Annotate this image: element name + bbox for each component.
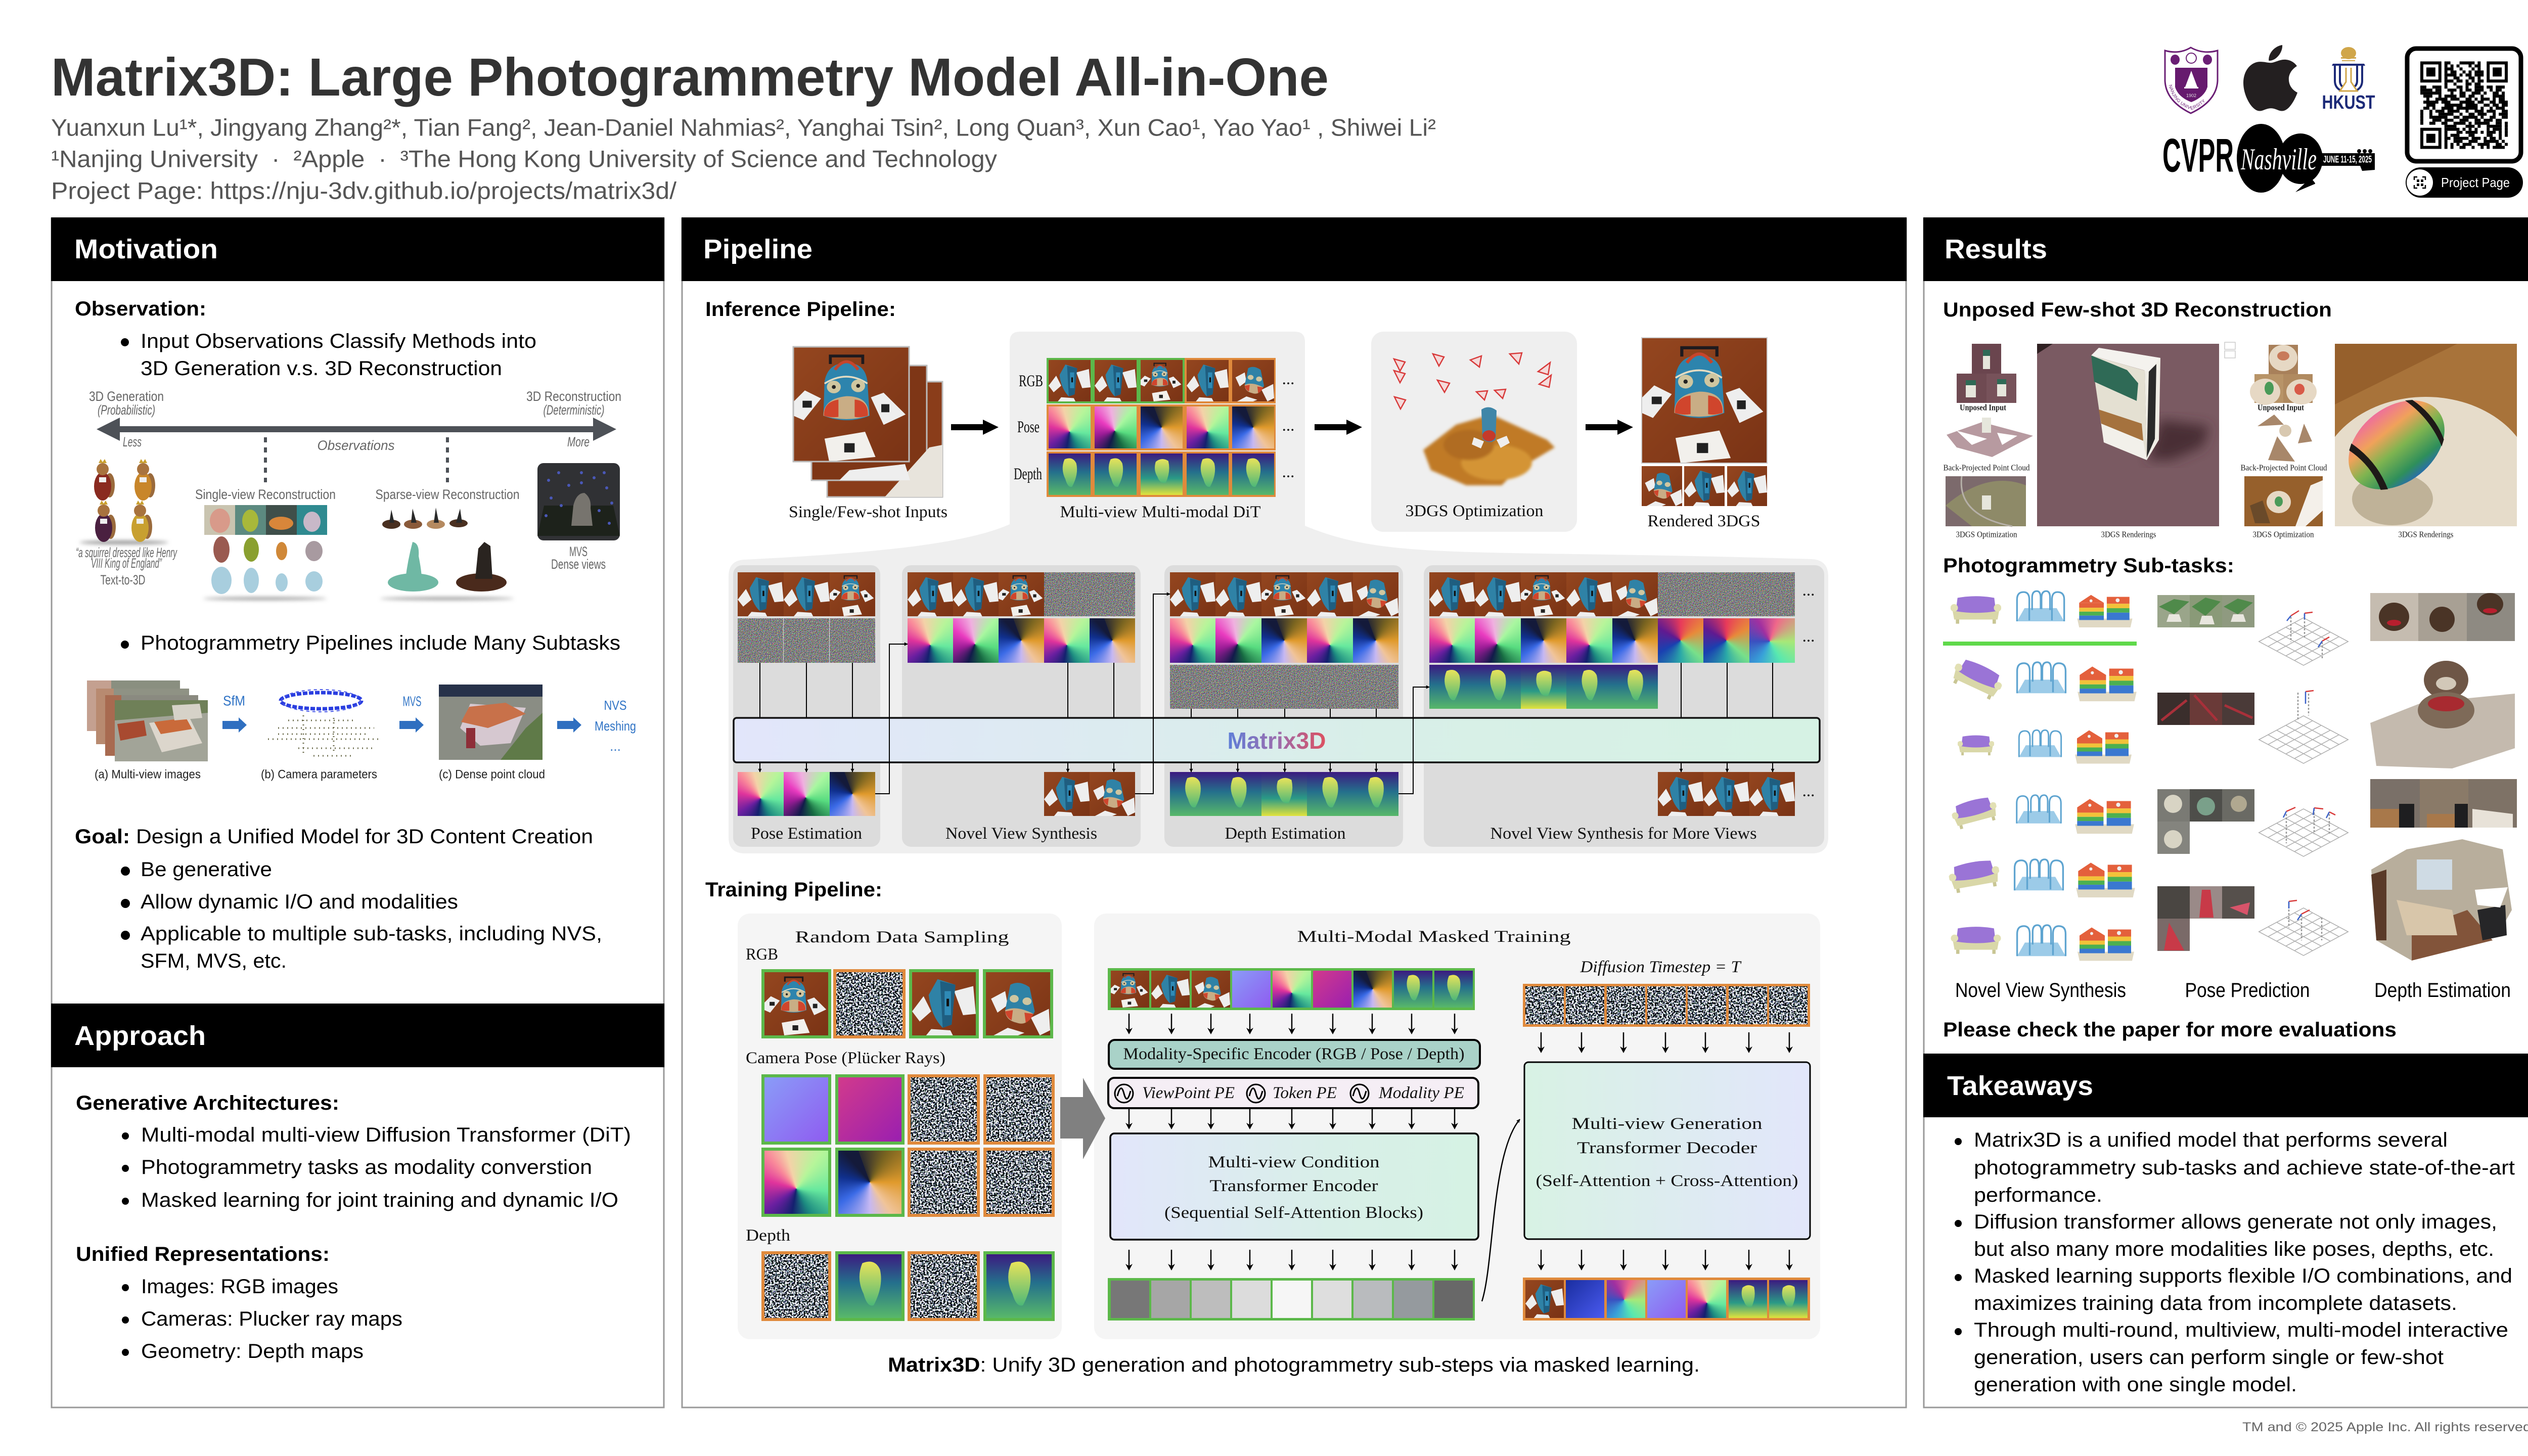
illustration: text-to-3D squirrels — [76, 459, 177, 587]
goal text — [75, 826, 602, 972]
unified representations text — [76, 1243, 402, 1362]
arrow: further subtasks: NVS — [604, 698, 627, 713]
Matrix3D model bar — [734, 718, 1820, 762]
takeaways list: generation with one single model. — [1974, 1374, 2297, 1396]
book example thumbnails — [1944, 344, 2033, 539]
chart: observation spectrum arrow: (Probabilistic) — [98, 402, 155, 418]
multi-view generation transformer decoder: (Self-Attention + Cross-Attention) — [1536, 1172, 1798, 1190]
input image stack: Single/Few-shot Inputs — [789, 503, 947, 521]
pipeline heading text: Pipeline — [703, 234, 812, 264]
unified representations text: Images: RGB images — [141, 1276, 338, 1298]
logo: CVPR Nashville: JUNE 11-15, 2025 — [2323, 155, 2372, 165]
multi-view multi-modal grid: ... — [1282, 463, 1294, 481]
panel: random data sampling: Depth — [746, 1226, 791, 1245]
unposed reconstruction heading: Unposed Few-shot 3D Reconstruction — [1943, 299, 2332, 321]
panel: random data sampling — [738, 914, 1062, 1339]
heading: takeaways: Takeaways — [1947, 1071, 2093, 1101]
sub-panel: novel view synthesis for more views — [1424, 565, 1824, 847]
output token strip — [1523, 1278, 1810, 1321]
affiliations: ¹Nanjing University · ²Apple · ³The Hong Kong University of Science and Technology — [51, 146, 998, 172]
novel view synthesis examples: Novel View Synthesis — [1955, 979, 2126, 1002]
book example thumbnails: Back-Projected Point Cloud — [1944, 463, 2030, 472]
illustration: MVS dense views: Dense views — [551, 557, 606, 572]
panel: pipeline — [682, 217, 1907, 1407]
multi-view multi-modal grid: Pose — [1017, 418, 1040, 436]
chart: observation spectrum arrow: (Deterministic) — [543, 402, 605, 418]
takeaways list: Matrix3D is a unified model that performs several — [1974, 1129, 2448, 1151]
ball 3DGS rendering: 3DGS Renderings — [2399, 530, 2453, 539]
multi-view multi-modal grid: ... — [1282, 370, 1294, 388]
illustration: camera parameters — [261, 690, 382, 782]
panel: random data sampling: RGB — [746, 945, 778, 964]
illustration: multi-view images — [87, 680, 208, 782]
ball example thumbnails: Unposed Input — [2258, 402, 2304, 413]
inference pipeline heading: Inference Pipeline: — [705, 298, 896, 321]
goal text: Allow dynamic I/O and modalities — [141, 891, 458, 913]
observation bullet text: 3D Generation v.s. 3D Reconstruction — [141, 357, 502, 380]
sub-panel: depth estimation — [1164, 565, 1403, 847]
depth estimation examples: Depth Estimation — [2374, 979, 2511, 1002]
arrow: DiT to 3DGS — [1315, 420, 1362, 435]
generative architectures text: Generative Architectures: — [76, 1092, 339, 1114]
illustration: text-to-3D squirrels: Text-to-3D — [100, 572, 146, 587]
sub-panel: novel view synthesis for more views: ... — [1802, 782, 1815, 800]
goal text: Applicable to multiple sub-tasks, including NVS, — [141, 923, 602, 945]
positional encodings: ViewPoint PE — [1142, 1084, 1235, 1102]
takeaways list: but also many more modalities like poses, depths, etc. — [1974, 1238, 2494, 1260]
book example thumbnails: 3DGS Optimization — [1956, 530, 2017, 539]
panel: motivation — [51, 217, 664, 1407]
goal text: Be generative — [141, 858, 272, 881]
modality-specific encoder: Modality-Specific Encoder (RGB / Pose / Depth) — [1123, 1045, 1464, 1063]
arrow: further subtasks: Meshing — [595, 718, 636, 734]
takeaways list — [1955, 1129, 2515, 1396]
connector lines into and out of Matrix3D — [760, 594, 1773, 794]
observation bullet text — [121, 330, 536, 380]
takeaways list: Masked learning supports flexible I/O combinations, and — [1974, 1265, 2512, 1287]
multi-view multi-modal grid: Multi-view Multi-modal DiT — [1060, 503, 1261, 521]
takeaways list: generation, users can perform single or few-shot — [1974, 1346, 2444, 1369]
training pipeline heading: Training Pipeline: — [705, 879, 882, 901]
panel: results — [1923, 217, 2528, 1407]
generative architectures text — [76, 1092, 631, 1211]
pipeline caption: Matrix3D : Unify 3D generation and photogrammetry sub-steps via masked learning. — [888, 1354, 1700, 1376]
modality-specific encoder — [1109, 1040, 1480, 1069]
arrow: SfM — [222, 693, 247, 733]
takeaways list: maximizes training data from incomplete datasets. — [1974, 1292, 2457, 1314]
Matrix3D model bar: Matrix3D — [1228, 727, 1326, 754]
panel: random data sampling: Camera Pose (Plücker Rays) — [746, 1049, 945, 1067]
unified representations text: Geometry: Depth maps — [141, 1340, 364, 1362]
multi-view condition transformer encoder: Transformer Encoder — [1209, 1177, 1378, 1195]
illustration: camera parameters: (b) Camera parameters — [261, 767, 377, 782]
photogrammetry sub-tasks heading: Photogrammetry Sub-tasks: — [1943, 555, 2234, 577]
rendered 3DGS images: Rendered 3DGS — [1647, 512, 1760, 530]
illustration: multi-view images: (a) Multi-view images — [95, 767, 201, 782]
multi-view condition transformer encoder: (Sequential Self-Attention Blocks) — [1164, 1204, 1423, 1222]
evaluation note: Please check the paper for more evaluations — [1943, 1019, 2397, 1041]
project page link: Project Page: https://nju-3dv.github.io/projects/matrix3d/ — [51, 177, 677, 204]
noise token strip — [1523, 984, 1810, 1027]
panel: multi-modal masked training: Multi-Modal Masked Training — [1297, 928, 1570, 946]
logo: Apple — [2243, 45, 2297, 111]
positional encodings: Modality PE — [1378, 1084, 1464, 1102]
illustration: sparse-view reconstruction: Sparse-view Reconstruction — [375, 487, 520, 502]
multi-view multi-modal grid: Depth — [1014, 465, 1042, 483]
positional encodings — [1108, 1078, 1478, 1108]
pose prediction examples — [2157, 595, 2348, 1002]
input token strip — [1108, 968, 1475, 1010]
arrow: 3DGS to render — [1586, 420, 1633, 435]
generative architectures text: Masked learning for joint training and dynamic I/O — [141, 1189, 618, 1211]
chart: observation spectrum arrow — [89, 389, 621, 482]
panel: 3DGS optimization — [1371, 332, 1577, 532]
arrows: noise to decoder — [1538, 1032, 1793, 1053]
arrows: encoder to tokens — [1125, 1250, 1458, 1270]
ball example thumbnails: Back-Projected Point Cloud — [2241, 463, 2327, 472]
positional encodings: Token PE — [1273, 1084, 1337, 1102]
novel view synthesis examples — [1943, 591, 2137, 1002]
logo: Nanjing University — [2164, 47, 2219, 114]
panel: multi-modal masked training — [1094, 914, 1820, 1339]
takeaways list: Through multi-round, multiview, multi-model interactive — [1974, 1319, 2508, 1341]
multi-view multi-modal grid: ... — [1282, 417, 1294, 435]
heading: approach — [51, 1004, 664, 1067]
illustration: single-view reconstruction — [195, 487, 336, 600]
arrow: MVS: MVS — [402, 694, 422, 709]
photogrammetry subtasks bullet: Photogrammetry Pipelines include Many Subtasks — [141, 632, 620, 654]
QR code — [2407, 49, 2521, 161]
multi-view condition transformer encoder: Multi-view Condition — [1208, 1153, 1379, 1171]
panel: multi-view DiT and expanded tasks background — [729, 332, 1828, 853]
rendered 3DGS images — [1642, 338, 1767, 530]
unified representations text: Unified Representations: — [76, 1243, 330, 1265]
arrow: encoder output to decoder — [1482, 1119, 1520, 1301]
illustration: dense point cloud — [439, 685, 545, 782]
multi-view generation transformer decoder: Multi-view Generation — [1571, 1115, 1763, 1133]
arrows: PE to condition encoder — [1125, 1109, 1458, 1129]
arrow: MVS — [399, 694, 424, 733]
arrow: further subtasks: ... — [610, 739, 621, 754]
goal text: Goal: Design a Unified Model for 3D Content Creation — [75, 826, 593, 848]
logo: Nanjing University: NANJING UNIVERSITY — [2169, 85, 2204, 110]
encoded grey token strip — [1108, 1278, 1475, 1321]
authors: Yuanxun Lu¹*, Jingyang Zhang²*, Tian Fang², Jean-Daniel Nahmias², Yanghai Tsin², Long Quan³, Xun Cao¹, Yao Yao¹ , Shiwei Li² — [51, 114, 1436, 141]
input image stack — [789, 347, 947, 521]
heading: approach: Approach — [74, 1021, 206, 1051]
illustration: single-view reconstruction: Single-view Reconstruction — [195, 487, 336, 502]
ball example thumbnails — [2241, 345, 2327, 539]
heading: takeaways — [1923, 1054, 2528, 1117]
book 3DGS rendering: 3DGS Renderings — [2101, 530, 2156, 539]
arrow: large grey sampling to training — [1060, 1078, 1105, 1159]
panel: random data sampling: Random Data Sampling — [795, 928, 1009, 946]
generative architectures text: Multi-modal multi-view Diffusion Transformer (DiT) — [141, 1124, 631, 1146]
logo: HKUST: HKUST — [2322, 92, 2375, 113]
ball 3DGS rendering — [2335, 344, 2517, 539]
chart: observation spectrum arrow: Less — [123, 434, 142, 449]
sub-panel: pose estimation — [733, 565, 880, 847]
logo: HKUST — [2322, 47, 2375, 113]
sub-panel: novel view synthesis — [902, 565, 1141, 847]
takeaways list: photogrammetry sub-tasks and achieve state-of-the-art — [1974, 1157, 2515, 1179]
pose prediction examples: Pose Prediction — [2185, 979, 2310, 1002]
illustration: sparse-view reconstruction — [375, 487, 520, 600]
goal text: SFM, MVS, etc. — [141, 950, 287, 972]
sub-panel: novel view synthesis for more views: Novel View Synthesis for More Views — [1491, 825, 1756, 843]
multi-view generation transformer decoder: Transformer Decoder — [1577, 1139, 1757, 1157]
sub-panel: novel view synthesis: Novel View Synthesis — [945, 825, 1097, 843]
chart: observation spectrum arrow: 3D Reconstruction — [526, 389, 621, 404]
generative architectures text: Photogrammetry tasks as modality converstion — [141, 1156, 592, 1178]
panel: 3DGS optimization: 3DGS Optimization — [1406, 502, 1543, 520]
takeaways list: Diffusion transformer allows generate not only images, — [1974, 1211, 2497, 1233]
illustration: MVS dense views: MVS — [569, 544, 588, 559]
multi-view multi-modal grid — [1014, 358, 1294, 521]
illustration: dense point cloud: (c) Dense point cloud — [439, 767, 545, 782]
ball example thumbnails: 3DGS Optimization — [2253, 530, 2314, 539]
multi-view condition transformer encoder — [1110, 1133, 1478, 1240]
takeaways list: performance. — [1974, 1184, 2102, 1206]
unified representations text: Cameras: Plucker ray maps — [141, 1308, 402, 1330]
arrow: further subtasks — [557, 698, 636, 754]
project page pill: Project Page — [2441, 175, 2510, 190]
observation bullet text: Input Observations Classify Methods into — [141, 330, 536, 352]
sub-panel: pose estimation: Pose Estimation — [751, 825, 862, 843]
arrows: decoder to output — [1538, 1250, 1793, 1270]
sub-panel: novel view synthesis for more views: ... — [1802, 581, 1815, 600]
illustration: MVS dense views — [537, 463, 620, 572]
book example thumbnails: Unposed Input — [1960, 402, 2006, 413]
illustration: text-to-3D squirrels: “a squirrel dressed like Henry — [76, 545, 177, 560]
logo: Nanjing University: 1902 — [2186, 93, 2196, 98]
title: Matrix3D: Large Photogrammetry Model All-in-One — [51, 48, 1329, 107]
arrows: tokens to encoder — [1125, 1014, 1458, 1034]
book 3DGS rendering — [2037, 342, 2235, 539]
sub-panel: depth estimation: Depth Estimation — [1225, 825, 1346, 843]
illustration: text-to-3D squirrels: VIII King of England” — [91, 556, 162, 571]
logo: CVPR Nashville: CVPR — [2162, 128, 2234, 182]
diffusion timestep label: Diffusion Timestep = T — [1579, 958, 1742, 976]
chart: observation spectrum arrow: More — [567, 434, 590, 449]
sub-panel: novel view synthesis for more views: ... — [1802, 627, 1815, 646]
multi-view generation transformer decoder — [1524, 1062, 1810, 1239]
observation heading: Observation: — [75, 298, 206, 320]
chart: observation spectrum arrow: 3D Generation — [89, 389, 164, 404]
chart: observation spectrum arrow: Observations — [318, 438, 394, 453]
multi-view multi-modal grid: RGB — [1019, 372, 1043, 390]
results heading text: Results — [1945, 234, 2047, 264]
motivation heading text: Motivation — [74, 234, 218, 264]
footer copyright: TM and © 2025 Apple Inc. All rights reserved. — [2242, 1420, 2528, 1434]
arrow: SfM: SfM — [223, 693, 245, 709]
project page pill — [2406, 167, 2523, 198]
logo: CVPR Nashville: Nashville — [2240, 143, 2317, 176]
arrow: inputs to DiT — [951, 420, 999, 435]
logo: CVPR Nashville — [2162, 124, 2375, 193]
depth estimation examples — [2370, 593, 2517, 1002]
